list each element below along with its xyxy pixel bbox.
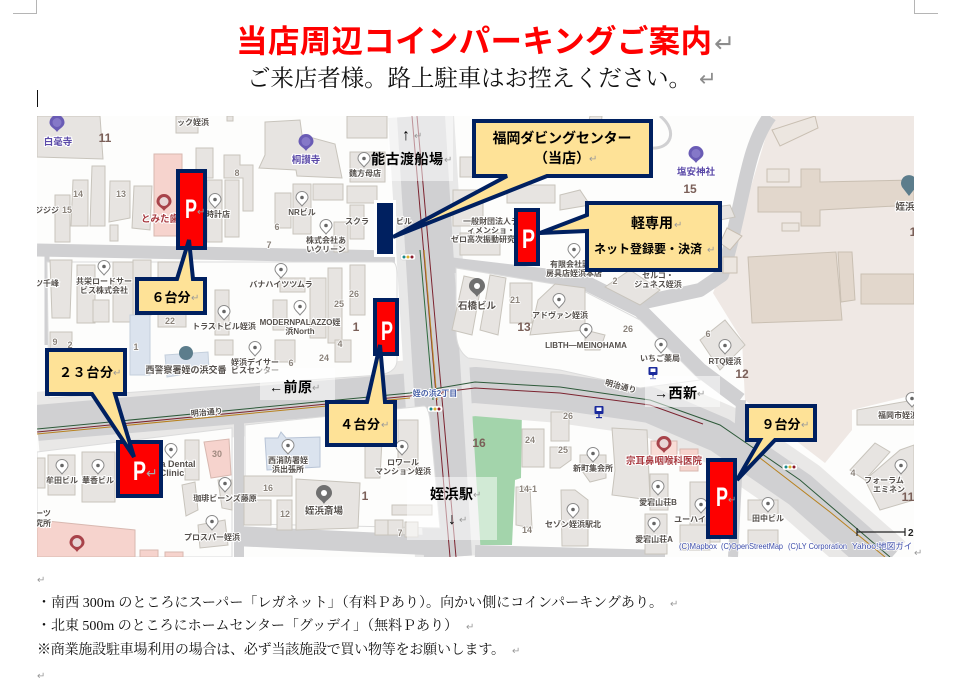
road label: 前原: ←前原 <box>269 379 312 395</box>
map: place labels: 25 <box>558 445 568 455</box>
parking marker: 9 spaces <box>708 460 736 537</box>
map: place labels: MODERNPALAZZO姪 <box>260 317 340 327</box>
map: place labels: 16 <box>263 483 273 493</box>
callout: light cars only: ↵ <box>674 220 682 231</box>
map: place labels: 24 <box>525 435 535 445</box>
map: place labels <box>35 117 918 544</box>
map: place labels: 2 <box>67 340 73 350</box>
map: translucent label patches <box>260 116 720 540</box>
map: place labels: 愛宕山荘A <box>635 534 673 544</box>
map: place labels: 15 <box>62 205 72 215</box>
map: place labels: いクリーン <box>306 244 346 254</box>
map: place labels: ジジジ <box>35 206 59 215</box>
callout: 4 spaces: ↵ <box>381 420 389 431</box>
map: place labels: ビス株式会社 <box>80 285 128 295</box>
map: place labels: 福岡市姪浜 <box>878 410 918 420</box>
map: place labels: 14 <box>522 525 532 535</box>
map: place labels: 11 <box>99 131 112 145</box>
map: park <box>472 416 522 545</box>
map: attribution: (C)Mapbox <box>679 541 718 551</box>
map: place labels: 30 <box>212 449 222 459</box>
map: place labels: 21 <box>510 295 520 305</box>
map: scale bar: 20 <box>908 528 920 539</box>
callout: light cars only <box>540 203 720 270</box>
map: place labels: 牟田ビル <box>46 475 78 485</box>
road label: 能古渡船場: ↑ <box>402 127 410 144</box>
callout: 4 spaces: ４台分 <box>340 417 380 432</box>
map: east school buildings <box>720 116 914 323</box>
callout: light cars only: ネット登録要・決済 <box>594 241 702 256</box>
parking marker: 9 spaces: ↵ <box>728 495 736 506</box>
map: place labels: トラストビル姪浜 <box>192 321 256 331</box>
parking marker: 4 spaces: P <box>381 316 393 346</box>
road label: 能古渡船場: ↵ <box>444 155 452 166</box>
map: place labels: 12 <box>735 367 749 381</box>
callout: light cars only: 軽専用 <box>631 215 673 231</box>
map: place labels: セルコ・ <box>642 271 674 280</box>
subtitle: ↵ <box>699 67 717 91</box>
map: place labels: マンション姪浜 <box>375 466 431 476</box>
map: place labels: 姪浜 <box>895 201 915 213</box>
parking marker: light cars: P <box>522 224 535 254</box>
map: place labels: 26 <box>349 289 359 299</box>
parking marker: 23 spaces: P <box>133 456 146 486</box>
map: place labels: 26 <box>623 324 633 334</box>
map: place labels: 新町集会所 <box>573 463 613 473</box>
map: place labels: 6 <box>274 222 280 232</box>
map: attribution: (C)LY Corporation <box>788 541 847 551</box>
map: place labels: プロスパー姪浜 <box>184 532 240 542</box>
map: scale bar <box>856 528 914 536</box>
parking marker: 23 spaces <box>118 442 161 496</box>
parking marker: 9 spaces: P <box>716 482 728 512</box>
road label: 能古渡船場 <box>371 127 452 167</box>
map: place labels: ロワール <box>387 458 419 467</box>
callout: 6 spaces <box>137 240 205 313</box>
map: place labels: ジュネス姪浜 <box>634 279 682 289</box>
map: place labels: ビル <box>396 216 412 226</box>
text cursor <box>37 90 38 107</box>
road label: 能古渡船場: ↵ <box>414 131 422 142</box>
map: place labels: 14 <box>73 189 83 199</box>
notes: ↵ <box>512 646 520 657</box>
map: place labels: NRビル <box>288 207 316 217</box>
map: place labels: 姪浜斎場 <box>305 505 343 517</box>
map: place labels: 11 <box>902 490 915 504</box>
parking marker: 6 spaces <box>178 171 205 248</box>
map: place labels: 華香ビル <box>82 475 114 485</box>
map: place labels: 浜North <box>285 326 315 336</box>
map: place labels: 24 <box>319 353 329 363</box>
map: place labels: スクラ <box>345 216 369 226</box>
map: place labels: 13 <box>517 320 531 334</box>
parking marker: light cars <box>516 210 538 264</box>
map: place labels: 16 <box>472 436 486 450</box>
map: place labels: 14-1 <box>519 484 537 494</box>
parking marker: 6 spaces: P <box>185 194 197 224</box>
map: place labels: 桐讃寺 <box>292 154 321 166</box>
callout: 6 spaces: ↵ <box>191 293 199 304</box>
map: place labels: 15 <box>683 182 697 196</box>
map: place labels: 珈琲ビーンズ藤原 <box>193 493 257 503</box>
road label: 能古渡船場: 能古渡船場 <box>371 151 443 167</box>
callout: store <box>393 121 651 237</box>
map: road blocks white <box>37 262 700 557</box>
callout: store: 福岡ダビングセンター <box>492 130 632 146</box>
map: roads <box>37 116 885 565</box>
subtitle: ご来店者様。路上駐車はお控えください。 <box>247 65 692 92</box>
map: place labels: ィメンショ・ <box>467 226 515 235</box>
map: place labels: アドヴァン姪浜 <box>532 310 588 320</box>
map: attribution: Yahoo!地図ガイドライン <box>852 541 946 551</box>
map: place labels: 4 <box>337 339 343 349</box>
map: place labels: 田中ビル <box>752 513 784 523</box>
map: place labels: 6 <box>705 329 711 339</box>
notes: ※商業施設駐車場利用の場合は、必ず当該施設で買い物等をお願いします。 <box>37 641 505 658</box>
map: place labels: 1 <box>910 225 917 239</box>
map: place labels: 浜出張所 <box>272 464 304 474</box>
map: place labels: RTQ姪浜 <box>709 356 741 366</box>
map: place labels: 8 <box>234 168 240 178</box>
map: place labels: 1 <box>133 342 139 352</box>
map: place labels: ユーハイ <box>674 515 706 524</box>
map: place labels: 明治通り <box>604 377 638 395</box>
callout: 23 spaces: ２３台分 <box>59 365 113 380</box>
map: place labels: 時計店 <box>206 209 230 219</box>
map: attribution <box>679 541 946 551</box>
map: place labels: 6 <box>288 358 294 368</box>
map: rail signals and bus stops <box>400 254 798 470</box>
store marker <box>374 200 396 257</box>
map: place labels: ゼロ高次振動研究所 <box>451 234 523 244</box>
map: place labels: エミネン <box>873 484 905 494</box>
map: place pins <box>50 115 918 552</box>
callout: 9 spaces: ↵ <box>801 420 809 431</box>
map: place labels: 25 <box>334 299 344 309</box>
map: place labels: 愛宕山荘B <box>639 497 677 507</box>
map: place labels: 26 <box>563 411 573 421</box>
callout: store: ↵ <box>589 154 597 165</box>
parking marker: 6 spaces: ↵ <box>197 207 205 218</box>
road label: 前原: ↵ <box>312 383 320 394</box>
map: place labels: 魏方母店 <box>349 168 381 178</box>
map: place labels: LIBTH—MEINOHAMA <box>545 341 627 350</box>
notes: ・北東 500m のところにホームセンター「グッデイ」（無料Ｐあり） <box>37 617 458 634</box>
parking marker: 23 spaces: ↵ <box>146 466 158 482</box>
map: place labels: 株式会社あ <box>306 235 346 245</box>
map: pink and blue facilities <box>37 154 698 557</box>
map: place labels: 有限会社諸 <box>550 259 590 269</box>
notes: ↵ <box>37 575 45 586</box>
map: place labels: 姪の浜2丁目 <box>413 388 457 398</box>
map: place labels: 一般財団法人デ <box>463 216 519 226</box>
map: place labels: a Dental <box>160 459 196 469</box>
map: place labels: いちご薬局 <box>640 353 680 363</box>
map: place labels: ーツ <box>35 509 51 518</box>
title: ↵ <box>714 29 735 58</box>
callout: 6 spaces: ６台分 <box>152 290 190 305</box>
map: place labels: ツ千峰 <box>35 278 59 288</box>
callout: light cars only: ↵ <box>707 245 715 256</box>
map: place labels: 共栄ロードサー <box>76 276 132 286</box>
notes: ・南西 300m のところにスーパー「レガネット」（有料Ｐあり）。向かい側にコインパーキングあり。 <box>37 594 663 611</box>
map: place labels: ック姪浜 <box>177 117 209 127</box>
road label: 姪浜駅: ↵ <box>459 515 467 526</box>
map: place labels: 22 <box>165 316 175 326</box>
map: attribution: (C)OpenStreetMap <box>721 541 783 551</box>
callout: 4 spaces <box>327 345 395 445</box>
notes: ↵ <box>466 622 474 633</box>
road label: 西新: →西新 <box>654 385 697 401</box>
road label: 姪浜駅: ↓ <box>448 511 456 528</box>
page corner marks <box>13 0 938 14</box>
map <box>35 115 946 565</box>
map: place labels: 塩安神社 <box>677 166 715 178</box>
map: east school grounds <box>713 116 914 463</box>
map: place labels: 房具店姪浜本店 <box>546 268 602 278</box>
map: place labels: 7 <box>397 528 403 538</box>
callout: 23 spaces: ↵ <box>113 368 121 379</box>
map: place labels: 姪浜デイサー <box>231 357 279 367</box>
map: place labels: 宗耳鼻咽喉科医院 <box>626 455 702 467</box>
map: place labels: バナハイツツムラ <box>249 280 313 289</box>
map: place labels: 7 <box>266 240 272 250</box>
road label: 姪浜駅: ↵ <box>473 490 481 501</box>
map: place labels: ビスセンター <box>231 365 279 375</box>
map: place labels: 西消防署姪 <box>268 455 308 465</box>
map: place labels: 究所 <box>35 518 51 528</box>
map: buildings <box>37 116 914 554</box>
map: rail lines <box>37 116 890 557</box>
road label: 西新: ↵ <box>697 389 705 400</box>
callout: 9 spaces: ９台分 <box>762 417 800 432</box>
notes <box>37 575 678 682</box>
map: place labels: 2 <box>612 276 618 286</box>
map: place labels: フォーラム <box>864 476 904 485</box>
map: place labels: セゾン姪浜駅北 <box>545 519 601 529</box>
title: 当店周辺コインパーキングご案内 <box>236 23 712 59</box>
map: place labels: 明治通り <box>190 406 223 418</box>
parking marker: 4 spaces <box>375 300 397 354</box>
map end return mark: ↵ <box>914 548 922 559</box>
map: place labels: 1 <box>362 489 369 503</box>
notes: ↵ <box>37 671 45 682</box>
notes: ↵ <box>670 599 678 610</box>
map: place labels: 9 <box>52 337 58 347</box>
road label: 姪浜駅 <box>430 486 481 528</box>
map: place labels: 12 <box>280 509 290 519</box>
map: place labels: 石橋ビル <box>458 300 496 312</box>
callout: store: （当店） <box>534 150 590 166</box>
map: place labels: 4 <box>850 468 856 478</box>
map: place labels: 西警察署姪の浜交番 <box>145 364 227 375</box>
callout: 23 spaces <box>47 350 134 457</box>
map: place labels: Clinic <box>160 468 184 478</box>
map: place labels: 1 <box>353 320 360 334</box>
map: place labels: 13 <box>116 189 126 199</box>
road label: 姪浜駅: 姪浜駅 <box>430 486 473 502</box>
callout: 9 spaces <box>737 406 815 480</box>
map: place labels: とみた歯 <box>141 213 179 225</box>
map: place labels: 白毫寺 <box>44 136 73 148</box>
